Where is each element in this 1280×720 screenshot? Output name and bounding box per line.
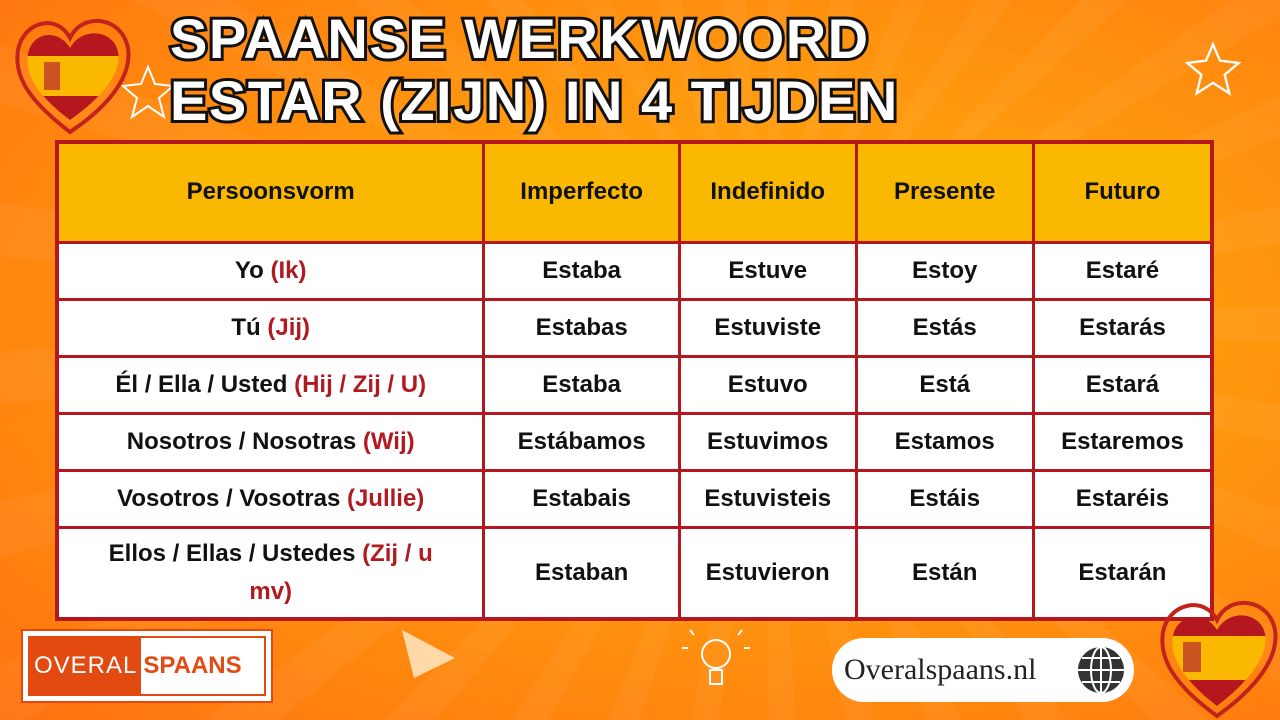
table: estar conjugations: Está — [919, 371, 970, 398]
table: estar conjugations: Yo (Ik) — [235, 257, 306, 284]
icon: star outline — [120, 64, 171, 120]
table: estar conjugations: Estabais — [532, 485, 631, 512]
table: estar conjugations: Estuvo — [728, 371, 808, 398]
table: estar conjugations: Estuvieron — [706, 559, 830, 586]
logo: overal spaans: OVERAL — [34, 652, 137, 679]
table: estar conjugations: Estaba — [542, 257, 621, 284]
website badge — [832, 638, 1134, 702]
table: estar conjugations: Persoonsvorm — [187, 178, 355, 205]
table: estar conjugations: Estás — [913, 314, 977, 341]
table: estar conjugations: Estaban — [535, 559, 628, 586]
table: estar conjugations: Estáis — [909, 485, 980, 512]
table: estar conjugations: Estabas — [536, 314, 628, 341]
table: estar conjugations: Estará — [1086, 371, 1159, 398]
table: estar conjugations: Estarás — [1079, 314, 1166, 341]
table: estar conjugations: Estuviste — [714, 314, 821, 341]
table: estar conjugations: Están — [912, 559, 977, 586]
table: estar conjugations: Estábamos — [518, 428, 646, 455]
table: estar conjugations: Estaré — [1086, 257, 1159, 284]
icon: star top-right — [1184, 42, 1242, 96]
table: estar conjugations: Estaba — [542, 371, 621, 398]
table: estar conjugations: Estuvimos — [707, 428, 828, 455]
website badge: Overalspaans.nl — [844, 653, 1036, 686]
icon: lightbulb — [682, 629, 750, 685]
icon: heart flag bottom-right — [1160, 600, 1278, 718]
table: estar conjugations — [55, 140, 1214, 621]
table: estar conjugations: Imperfecto — [520, 178, 643, 205]
table: estar conjugations: mv) — [249, 578, 292, 605]
table: estar conjugations: Ellos / Ellas / Ustedes (Zij / u — [109, 540, 433, 567]
table: estar conjugations: Estoy — [912, 257, 977, 284]
table: estar conjugations: Futuro — [1084, 178, 1160, 205]
icon: heart flag top-left — [15, 18, 130, 134]
table: estar conjugations: Él / Ella / Usted (Hij / Zij / U) — [115, 371, 426, 398]
table: estar conjugations: Estarán — [1078, 559, 1166, 586]
icon: globe — [1078, 647, 1124, 693]
table: estar conjugations: Estuvisteis — [704, 485, 831, 512]
table: estar conjugations: Indefinido — [710, 178, 825, 205]
icon: paper plane — [402, 630, 455, 678]
title — [168, 7, 899, 134]
table: estar conjugations: Nosotros / Nosotras (Wij) — [127, 428, 415, 455]
title: SPAANSE WERKWOORD — [170, 7, 870, 70]
title: ESTAR (ZIJN) IN 4 TIJDEN — [170, 69, 899, 132]
table: estar conjugations: Estuve — [728, 257, 807, 284]
logo: overal spaans — [21, 629, 273, 703]
table: estar conjugations: Estamos — [895, 428, 995, 455]
table: estar conjugations: Vosotros / Vosotras (Jullie) — [117, 485, 424, 512]
logo: overal spaans: SPAANS — [143, 652, 242, 679]
table: estar conjugations: Tú (Jij) — [231, 314, 310, 341]
table: estar conjugations: Estaremos — [1061, 428, 1184, 455]
table: estar conjugations: Estaréis — [1076, 485, 1169, 512]
table: estar conjugations: Presente — [894, 178, 995, 205]
